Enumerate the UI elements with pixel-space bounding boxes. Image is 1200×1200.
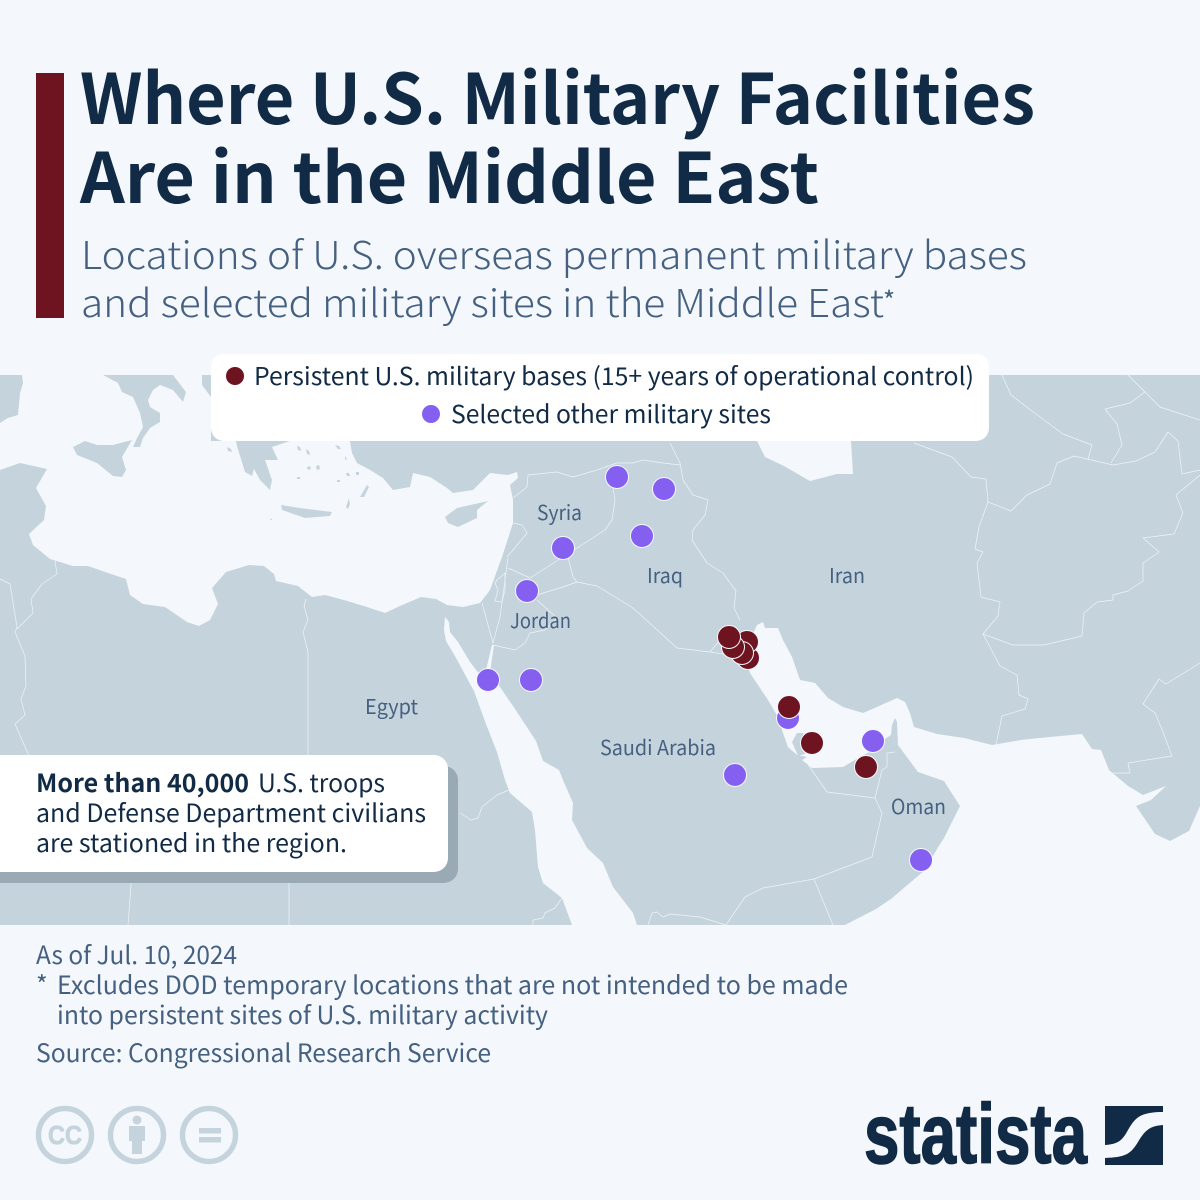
callout text: More than 40,000 <box>36 764 249 800</box>
Sicily <box>73 440 132 477</box>
map <box>0 375 1200 925</box>
subtitle: Locations of U.S. overseas permanent military bases <box>81 225 1027 281</box>
legend item: other sites: Selected other military sites <box>451 396 771 431</box>
callout panel <box>0 755 448 872</box>
map land background <box>0 375 1200 925</box>
callout <box>0 755 458 883</box>
callout text <box>36 764 426 860</box>
footnotes and source: into persistent sites of U.S. military activity <box>57 996 548 1032</box>
Sardinia <box>0 375 23 423</box>
legend <box>211 354 989 441</box>
national borders <box>0 375 1200 925</box>
country labels: Iraq <box>647 559 683 589</box>
country labels: Saudi Arabia <box>600 731 716 761</box>
Mediterranean Sea <box>0 375 518 626</box>
Italy <box>103 375 186 447</box>
Balkans edge <box>202 375 211 397</box>
country labels <box>365 496 946 820</box>
Qatar <box>792 733 808 756</box>
callout text: and Defense Department civilians <box>36 794 426 830</box>
footnotes and source: Excludes DOD temporary locations that are not intended to be made <box>57 966 848 1002</box>
footnotes and source: As of Jul. 10, 2024 <box>36 936 237 972</box>
subtitle: and selected military sites in the Middle East <box>81 273 884 329</box>
country labels: Jordan <box>510 604 571 634</box>
title: Are in the Middle East <box>79 123 819 224</box>
markers: persistent U.S. military bases <box>718 626 878 778</box>
icon: no derivatives <box>182 1108 236 1162</box>
Crete <box>281 505 332 518</box>
Red Sea <box>444 617 637 925</box>
legend item: persistent bases: Persistent U.S. military bases (15+ years of operational control) <box>254 358 974 393</box>
Aegean islands <box>227 445 369 520</box>
markers: selected other military sites <box>476 466 932 872</box>
statista logo <box>864 1087 1163 1181</box>
legend panel <box>211 354 989 441</box>
country labels: Syria <box>537 496 582 526</box>
callout shadow <box>0 766 458 883</box>
title <box>79 44 1035 224</box>
footnotes and source: Source: Congressional Research Service <box>36 1034 491 1070</box>
Caspian Sea <box>757 441 853 481</box>
footnotes and source <box>36 936 848 1070</box>
footnotes and source: * <box>36 966 48 1002</box>
callout text: U.S. troops <box>258 764 385 800</box>
country labels: Egypt <box>365 690 418 720</box>
title accent bar <box>36 73 64 318</box>
logo mark <box>1105 1106 1163 1165</box>
subtitle <box>81 225 1027 329</box>
Cyprus <box>445 501 488 527</box>
country labels: Oman <box>891 790 946 820</box>
icon: attribution <box>110 1108 164 1162</box>
icon: creative commons: CC <box>48 1120 82 1150</box>
logo wordmark: statista <box>864 1087 1088 1181</box>
Persian Gulf and Arabian Sea <box>745 622 1200 925</box>
country labels: Iran <box>829 559 865 589</box>
title: Where U.S. Military Facilities <box>80 44 1035 145</box>
Greece <box>236 441 290 490</box>
subtitle: * <box>883 281 895 318</box>
callout text: are stationed in the region. <box>36 824 347 860</box>
icon: creative commons <box>38 1108 92 1162</box>
